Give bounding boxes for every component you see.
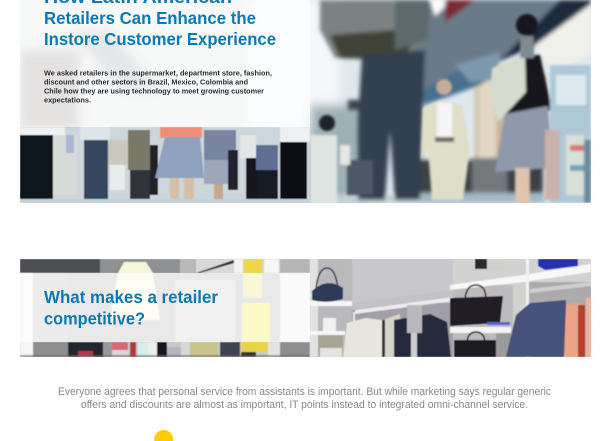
hero intro text: discount and other sectors in Brazil, Mexico, Colombia and bbox=[44, 80, 248, 86]
section heading: competitive? bbox=[44, 308, 145, 328]
intro paragraph: offers and discounts are almost as important, IT points instead to integrated omni-channel service. bbox=[81, 399, 528, 411]
section translucent heading panel bbox=[20, 273, 310, 342]
hero intro text: Chile how they are using technology to meet growing customer bbox=[44, 88, 264, 96]
hero title: Retailers Can Enhance the bbox=[44, 8, 256, 28]
hero translucent text panel bbox=[20, 0, 310, 127]
hero title bbox=[44, 0, 276, 49]
hero title: Instore Customer Experience bbox=[44, 29, 276, 49]
hero intro text bbox=[44, 70, 272, 104]
section photo: clothing store interior bbox=[20, 259, 591, 359]
intro paragraph bbox=[58, 386, 551, 411]
section heading bbox=[44, 287, 218, 328]
intro paragraph: Everyone agrees that personal service from assistants is important. But while marketing says regular generic bbox=[58, 386, 551, 398]
section heading: What makes a retailer bbox=[44, 287, 218, 307]
hero intro text: expectations. bbox=[44, 98, 91, 104]
hero intro text: We asked retailers in the supermarket, department store, fashion, bbox=[44, 70, 272, 78]
icon: yellow circle bbox=[154, 430, 173, 441]
hero photo: blurred shoppers in a mall bbox=[20, 0, 591, 203]
